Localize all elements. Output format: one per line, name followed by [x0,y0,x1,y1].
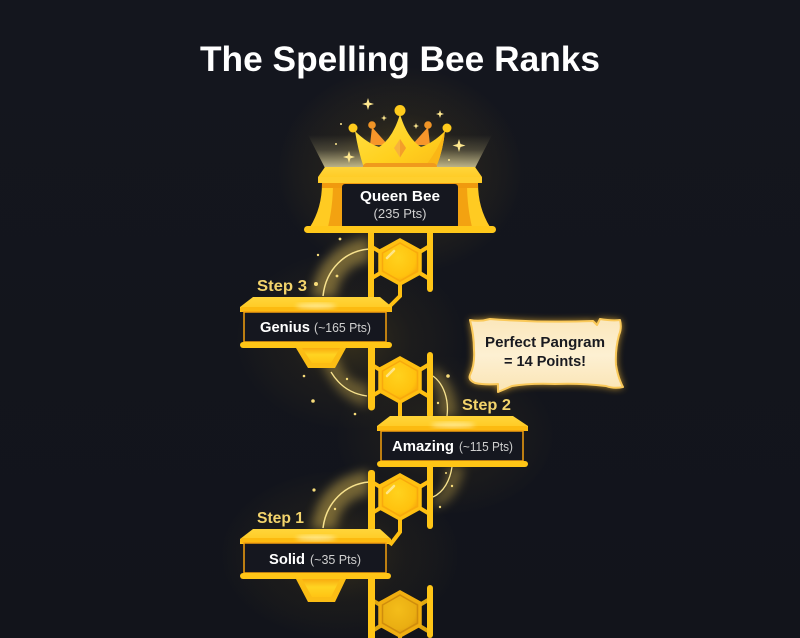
rank points: Genius: (~165 Pts) [314,320,371,335]
icon: crown [348,105,452,171]
hexagon ladder: top segment [368,230,433,306]
crown light beams [308,135,492,168]
rank label: Queen Bee: Queen Bee [360,189,440,205]
step label: Step 2: Step 2 [462,397,511,414]
rank points: Amazing: (~115 Pts) [459,439,513,454]
step label: Step 1: Step 1 [257,510,304,527]
callout: perfect pangram [470,319,623,392]
platform: Genius [240,297,392,368]
rank label: Solid: Solid [269,552,305,568]
platform: Queen Bee [304,167,496,233]
title: The Spelling Bee Ranks [200,40,600,79]
callout value: = 14 Points! [504,354,586,370]
platform: Amazing [377,416,528,467]
glow arcs behind the platforms [303,238,464,529]
hexagon ladder: third segment [368,462,433,545]
hexagon ladder: bottom segment [368,578,433,638]
rank points: Queen Bee: (235 Pts) [374,206,426,221]
rank label: Amazing: Amazing [392,439,454,455]
hexagon ladder: second segment [368,344,433,418]
rank label: Genius: Genius [260,320,310,336]
platform: Solid [240,529,391,602]
sparkles around the crown [335,98,466,163]
rank points: Solid: (~35 Pts) [310,552,361,567]
step label: Step 3: Step 3 [257,278,307,295]
callout text: Perfect Pangram [485,335,605,351]
